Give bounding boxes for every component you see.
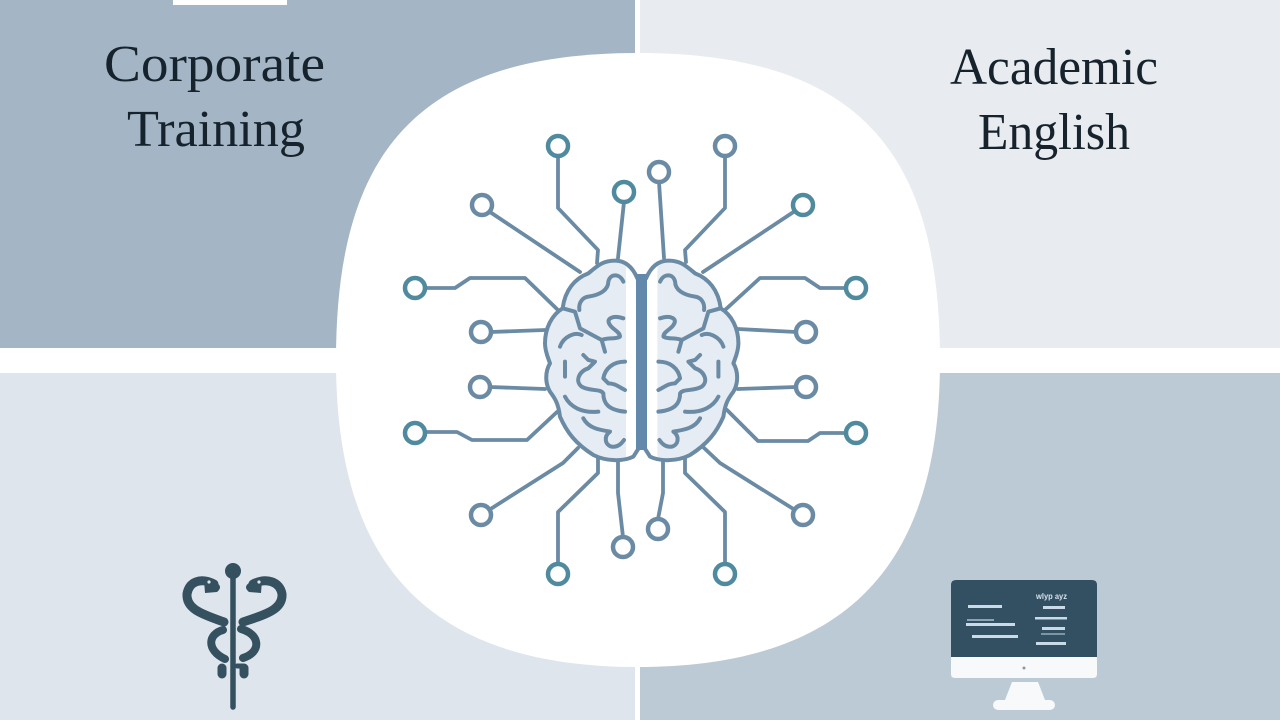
heading: Academic English: English [978, 104, 1130, 161]
icon: desktop monitor [951, 580, 1097, 710]
brain right hemisphere [645, 260, 738, 462]
panel: academic English quadrant [640, 0, 1280, 348]
icon: caduceus medical symbol [187, 563, 282, 707]
icon: brain with circuit network [405, 136, 866, 584]
heading: Corporate Training: Training [127, 101, 305, 158]
monitor stand [1005, 682, 1045, 700]
screen text lines [966, 605, 1067, 645]
heading: Corporate Training [104, 36, 325, 158]
panel: technology quadrant [640, 373, 1280, 720]
circuit nodes [405, 136, 866, 584]
heading: Academic English [950, 39, 1158, 161]
heading: Corporate Training: Corporate [104, 36, 325, 93]
screen small label: wlyp ayz [1035, 592, 1067, 601]
monitor screen [951, 580, 1097, 657]
top white tab [173, 0, 287, 5]
circuit wires [425, 156, 846, 564]
panel: medical quadrant [0, 373, 635, 720]
panel: corporate training quadrant [0, 0, 635, 348]
monitor base panel [951, 657, 1097, 678]
brain left hemisphere [545, 260, 639, 462]
heading: Academic English: Academic [950, 39, 1158, 96]
brain centre bar [636, 274, 647, 450]
central white rounded panel [336, 53, 940, 667]
